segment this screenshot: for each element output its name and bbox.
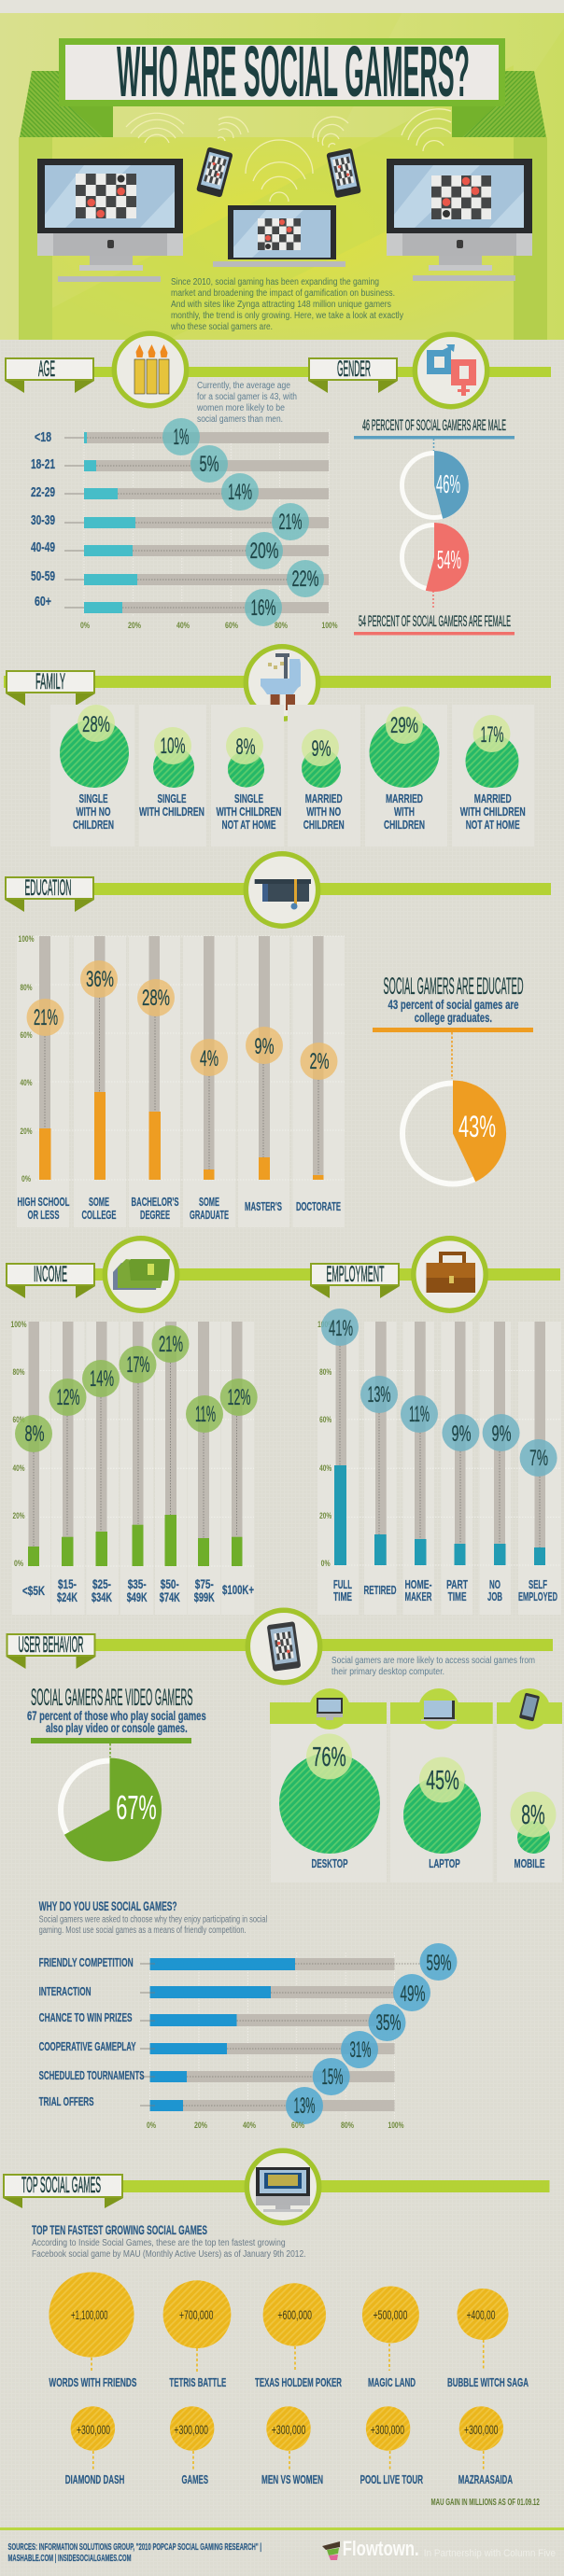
chart: game bubbles: +500,000: [374, 2307, 408, 2322]
text: age intro: women more likely to be: [196, 403, 285, 413]
chart: male donut: 46%: [436, 469, 460, 498]
chart: income bars: $25-: [92, 1576, 111, 1591]
chart: age bars: 80%: [275, 621, 288, 630]
chart: income bars: $35-: [128, 1576, 147, 1591]
chart: education bars: OR LESS: [28, 1208, 60, 1222]
icon: graduation cap: [246, 854, 318, 926]
chart: education bars: 40%: [21, 1078, 32, 1087]
icon: mini laptop: [421, 1701, 457, 1721]
chart: employment bars: MAKER: [405, 1589, 432, 1603]
chart: game bubbles: +300,000: [371, 2422, 404, 2437]
chart: video gamers donut: 67%: [116, 1788, 157, 1827]
chart: education bars: [17, 934, 345, 1227]
panel: header: [0, 0, 564, 340]
chart: education bars: COLLEGE: [82, 1208, 117, 1222]
chart: income bars: 11%: [195, 1402, 216, 1427]
text: device intro: their primary desktop computer.: [331, 1667, 444, 1677]
chart: reasons bars: 31%: [349, 2037, 372, 2063]
chart: education bars: MASTER'S: [245, 1199, 282, 1213]
chart: income bars: [11, 1320, 258, 1615]
section: why use social games: [39, 1898, 457, 2130]
chart: employment bars: 7%: [529, 1446, 548, 1471]
chart: age bars: 60+: [35, 594, 51, 609]
text: age intro: Currently, the average age: [197, 381, 290, 391]
heading: why: WHY DO YOU USE SOCIAL GAMES?: [39, 1898, 177, 1913]
chart: reasons bars: 49%: [400, 1981, 426, 2007]
text: why intro: [39, 1915, 267, 1936]
icon: right desktop computer: [387, 159, 532, 281]
icon: candles: [114, 333, 187, 406]
chart: age bars: 16%: [250, 595, 276, 621]
labels: family: SINGLE: [78, 791, 108, 805]
chart: reasons bars: TRIAL OFFERS: [39, 2094, 94, 2108]
text: why intro: gaming. Most use social games as a means of friendly competition.: [39, 1925, 247, 1936]
chart: employment bars: SELF: [529, 1577, 547, 1591]
chart: game bubbles: MAZRAASAIDA: [458, 2472, 513, 2486]
heading: education: EDUCATION: [24, 875, 71, 901]
labels: family: WITH CHILDREN: [217, 805, 282, 819]
heading: employment: [310, 1262, 400, 1298]
section: family: [4, 647, 551, 847]
chart: education bars: 2%: [310, 1049, 329, 1074]
callout: social gamers are video gamers: also play video or console games.: [46, 1720, 188, 1735]
chart: game bubbles: TETRIS BATTLE: [169, 2375, 227, 2389]
chart: age bars: 0%: [80, 621, 90, 630]
chart: income bars: <$5K: [22, 1583, 45, 1598]
chart: game bubbles: [49, 2272, 529, 2486]
icon: left phone: [196, 147, 233, 198]
chart: education bars: SOME: [199, 1195, 219, 1209]
chart: reasons bars: 0%: [147, 2121, 156, 2130]
icon: laptop: [213, 205, 345, 267]
icon: desktop with game: [247, 2150, 319, 2223]
chart: reasons bars: 13%: [293, 2093, 316, 2119]
chart: employment bars: [317, 1309, 561, 1615]
chart: income bars: $34K: [92, 1589, 112, 1604]
chart: age bars: 21%: [278, 510, 303, 535]
chart: education bars: DOCTORATE: [296, 1199, 341, 1213]
chart: reasons bars: 60%: [291, 2121, 304, 2130]
chart: income bars: $49K: [127, 1589, 148, 1604]
chart: game bubbles: MEN VS WOMEN: [261, 2472, 323, 2486]
chart: age bars: 20%: [250, 539, 278, 564]
chart: employment bars: 100%: [317, 1320, 333, 1329]
heading: family: [6, 669, 95, 706]
labels: family: MARRIED: [474, 791, 512, 805]
chart: age bars: <18: [35, 429, 51, 445]
chart: employment bars: FULL: [333, 1577, 352, 1591]
text: age intro: for a social gamer is 43, with: [197, 392, 297, 402]
chart: age bars: 1%: [174, 425, 189, 450]
chart: device bubbles: [279, 1734, 557, 1870]
icon: gender symbols: [415, 334, 487, 407]
chart: reasons bars: [39, 1943, 457, 2130]
chart: family bubbles: 28%: [82, 712, 110, 737]
icon: briefcase: [414, 1239, 486, 1310]
chart: income bars: 8%: [24, 1421, 45, 1447]
chart: family bubbles: 17%: [480, 722, 504, 748]
chart: game bubbles: +300,000: [174, 2422, 208, 2437]
chart: game bubbles: +600,000: [277, 2307, 312, 2322]
icon: tablet: [247, 1610, 320, 1683]
section: top social games: TOP SOCIAL GAMES: [21, 2173, 101, 2198]
chart: income bars: 100%: [11, 1320, 26, 1329]
icon: mini phone: [519, 1692, 540, 1722]
chart: female donut: 54%: [437, 545, 461, 574]
chart: reasons bars: 15%: [321, 2065, 344, 2090]
labels: family: NOT AT HOME: [466, 818, 520, 832]
callout: social gamers are educated: college graduates.: [415, 1011, 492, 1025]
chart: income bars: 0%: [14, 1559, 23, 1568]
chart: education bars: 20%: [21, 1127, 32, 1136]
text: why intro: Social gamers were asked to choose why they enjoy participating in social: [39, 1915, 267, 1925]
chart: age bars: 30-39: [31, 512, 55, 528]
chart: family bubbles: 8%: [235, 735, 256, 760]
chart: income bars: $15-: [58, 1576, 77, 1591]
chart: reasons bars: SCHEDULED TOURNAMENTS: [39, 2068, 145, 2082]
heading: gender: GENDER: [337, 357, 371, 382]
callout: social gamers are video gamers: 67 percent of those who play social games: [27, 1708, 206, 1723]
chart: education bars: 28%: [142, 986, 170, 1011]
chart: income bars: 80%: [13, 1367, 24, 1377]
text: sources: [7, 2542, 261, 2564]
chart: income bars: $24K: [57, 1589, 78, 1604]
chart: income bars: 17%: [127, 1352, 149, 1378]
chart: employment bars: 13%: [368, 1382, 390, 1407]
chart: employment bars: NO: [489, 1577, 501, 1591]
chart: income bars: $74K: [160, 1589, 180, 1604]
chart: income bars: 12%: [56, 1385, 80, 1410]
chart: reasons bars: 80%: [341, 2121, 354, 2130]
chart: family bubbles: 10%: [161, 734, 185, 759]
chart: device bubbles: LAPTOP: [429, 1856, 460, 1870]
chart: income bars: 60%: [13, 1415, 24, 1424]
heading: top social games: [3, 2173, 123, 2208]
chart: age bars: 60%: [225, 621, 238, 630]
chart: employment bars: PART: [446, 1577, 468, 1591]
icon: left desktop computer: [37, 159, 183, 282]
chart: employment bars: 40%: [319, 1463, 331, 1473]
chart: income bars: $75-: [195, 1576, 214, 1591]
chart: income bars: 14%: [90, 1366, 114, 1392]
chart: education donut: 43%: [458, 1110, 496, 1143]
panels: devices: [270, 1688, 562, 1883]
chart: game bubbles: DIAMOND DASH: [65, 2472, 124, 2486]
intro text: [170, 277, 403, 332]
chart: education bars: 100%: [19, 934, 34, 944]
chart: reasons bars: 100%: [388, 2121, 403, 2130]
heading: user behavior: [6, 1632, 95, 1669]
heading: gender: [308, 357, 398, 393]
section: user behavior: [6, 1610, 562, 1883]
chart: income bars: 40%: [13, 1463, 24, 1473]
chart: reasons bars: 59%: [426, 1951, 452, 1976]
chart: education bars: 80%: [21, 983, 32, 992]
intro text: And with sites like Zynga attracting 148 million unique gamers: [171, 300, 391, 310]
chart: reasons bars: 40%: [243, 2121, 256, 2130]
callout: social gamers are video gamers: [27, 1685, 206, 1757]
chart: reasons bars: 35%: [375, 2010, 402, 2036]
chart: reasons bars: CHANCE TO WIN PRIZES: [39, 2010, 133, 2024]
chart: game bubbles: +700,000: [179, 2307, 214, 2322]
chart: reasons bars: FRIENDLY COMPETITION: [39, 1955, 134, 1969]
section: income: [6, 1239, 560, 1615]
chart: employment bars: 20%: [319, 1511, 331, 1520]
labels: family: CHILDREN: [384, 818, 425, 832]
text: device intro: [331, 1656, 535, 1677]
section: employment: [310, 1239, 561, 1615]
intro text: market and broadening the impact of gamification on business.: [171, 288, 395, 299]
chart: education bars: 36%: [86, 967, 114, 992]
chart: game bubbles: +300,000: [464, 2422, 499, 2437]
chart: device bubbles: DESKTOP: [312, 1856, 348, 1870]
logo text: flowtown: Flowtown.: [343, 2537, 419, 2560]
chart: education bars: HIGH SCHOOL: [17, 1195, 70, 1209]
chart: education bars: 60%: [21, 1030, 32, 1040]
chart: video gamers donut: [61, 1758, 162, 1862]
chart: employment bars: 60%: [319, 1415, 331, 1424]
chart: education bars: 4%: [200, 1046, 219, 1071]
chart: income bars: $99K: [194, 1589, 215, 1604]
callout: male stat: [354, 416, 515, 451]
text: age intro: [196, 381, 297, 425]
icon: mini desktop: [317, 1698, 343, 1720]
callout: social gamers are educated: [373, 973, 533, 1079]
chart: age bars: 50-59: [31, 568, 55, 584]
chart: income bars: $100K+: [222, 1582, 254, 1597]
text: sources: SOURCES: INFORMATION SOLUTIONS GROUP, "2010 POPCAP SOCIAL GAMING RESEARCH" |: [7, 2542, 261, 2553]
labels: family: NOT AT HOME: [222, 818, 276, 832]
chart: employment bars: TIME: [448, 1589, 467, 1603]
text: top ten intro: According to Inside Social Games, these are the top ten fastest growing: [32, 2238, 286, 2248]
chart: game bubbles: +400,00: [467, 2307, 496, 2322]
section: user behavior: SOCIAL GAMERS ARE VIDEO GAMERS: [31, 1685, 192, 1711]
chart: age bars: 40-49: [31, 539, 55, 555]
chart: male donut: [402, 451, 469, 519]
chart: female donut: [402, 523, 469, 592]
logo text: flowtown: [343, 2537, 556, 2560]
chart: age bars: 40%: [176, 621, 190, 630]
heading: age: [5, 357, 94, 393]
chart: income bars: 21%: [159, 1332, 183, 1357]
heading: education: [5, 875, 94, 912]
icon: flowtown logo: [322, 2541, 340, 2560]
chart: employment bars: 80%: [319, 1367, 331, 1377]
intro text: Since 2010, social gaming has been expanding the gaming: [171, 277, 379, 287]
labels: family: WITH CHILDREN: [460, 805, 526, 819]
chart: education bars: BACHELOR'S: [131, 1195, 179, 1209]
chart: reasons bars: 20%: [194, 2121, 207, 2130]
chart: employment bars: 11%: [409, 1402, 430, 1427]
chart: family bubbles: 9%: [312, 736, 331, 762]
chart: education bars: GRADUATE: [190, 1208, 229, 1222]
icon: money: [105, 1239, 177, 1310]
chart: reasons bars: COOPERATIVE GAMEPLAY: [39, 2039, 136, 2053]
chart: employment bars: 9%: [491, 1421, 512, 1447]
labels: family: CHILDREN: [303, 818, 345, 832]
callout: female stat: [354, 591, 515, 635]
section: employment: EMPLOYMENT: [327, 1262, 385, 1287]
icon: wifi signals: [126, 109, 451, 202]
heading: income: [6, 1262, 95, 1298]
section: user behavior: USER BEHAVIOR: [19, 1632, 84, 1658]
chart: age bars: 100%: [321, 621, 338, 630]
section: gender: [308, 334, 515, 635]
chart: employment bars: HOME-: [405, 1577, 431, 1591]
footer: [0, 2527, 564, 2564]
chart: game bubbles: WORDS WITH FRIENDS: [49, 2375, 137, 2389]
text: top ten intro: Facebook social game by MAU (Monthly Active Users) as of January 9th 2012.: [32, 2249, 306, 2260]
chart: education bars: DEGREE: [140, 1208, 170, 1222]
icon: right phone: [326, 148, 361, 198]
chart: employment bars: 9%: [452, 1421, 471, 1447]
intro text: monthly, the trend is only growing. Here, we take a look at exactly: [171, 311, 403, 321]
section: education: [5, 854, 551, 1227]
heading: income: INCOME: [34, 1262, 67, 1287]
heading: family: FAMILY: [35, 669, 65, 694]
labels: family: MARRIED: [305, 791, 343, 805]
chart: family bubbles: 29%: [390, 713, 418, 738]
chart: game bubbles: +300,000: [77, 2422, 110, 2437]
chart: family bubbles: [60, 705, 519, 788]
chart: income bars: 12%: [228, 1385, 250, 1410]
text: age intro: social gamers than men.: [197, 414, 283, 425]
chart: age bars: [31, 418, 338, 630]
chart: education bars: 0%: [21, 1174, 31, 1183]
labels: family: WITH: [394, 805, 415, 819]
intro text: who these social gamers are.: [170, 322, 273, 332]
chart: education bars: SOME: [89, 1195, 109, 1209]
heading: top ten: TOP TEN FASTEST GROWING SOCIAL GAMES: [32, 2222, 207, 2237]
icon: sink: [246, 647, 318, 719]
section: top social games: [3, 2150, 549, 2508]
section: age: [5, 333, 551, 630]
chart: game bubbles: +1,100,000: [71, 2307, 108, 2322]
text: sources: MASHABLE.COM | INSIDESOCIALGAMES.COM: [7, 2554, 131, 2564]
chart: education bars: 21%: [34, 1005, 58, 1030]
chart: age bars: 22-29: [31, 484, 55, 500]
chart: income bars: 20%: [13, 1511, 24, 1520]
chart: income bars: $50-: [161, 1576, 179, 1591]
chart: reasons bars: INTERACTION: [39, 1984, 92, 1998]
labels: family: CHILDREN: [73, 818, 114, 832]
chart: game bubbles: GAMES: [181, 2472, 208, 2486]
chart: device bubbles: 45%: [426, 1766, 459, 1796]
labels: family: WITH NO: [306, 805, 341, 819]
chart: game bubbles: POOL LIVE TOUR: [360, 2472, 423, 2486]
chart: game bubbles: +300,000: [272, 2422, 306, 2437]
chart: education donut: [402, 1081, 506, 1183]
chart: device bubbles: MOBILE: [514, 1856, 545, 1870]
chart: age bars: 20%: [128, 621, 141, 630]
labels: family: [73, 791, 526, 832]
heading: age: AGE: [38, 357, 55, 382]
chart: employment bars: TIME: [333, 1589, 352, 1603]
chart: employment bars: 41%: [329, 1316, 353, 1341]
labels: family: SINGLE: [234, 791, 263, 805]
chart: employment bars: JOB: [487, 1589, 502, 1603]
chart: employment bars: RETIRED: [364, 1583, 396, 1597]
panels: family columns: [50, 705, 534, 847]
chart: device bubbles: 8%: [521, 1800, 545, 1830]
chart: education bars: 9%: [254, 1034, 275, 1059]
chart: age bars: 22%: [291, 567, 319, 592]
labels: family: SINGLE: [157, 791, 187, 805]
chart: game bubbles: TEXAS HOLDEM POKER: [255, 2375, 342, 2389]
chart: age bars: 18-21: [31, 456, 55, 472]
text: top ten intro: [32, 2238, 306, 2260]
chart: age bars: 5%: [200, 452, 219, 477]
chart: device bubbles: 76%: [312, 1743, 346, 1772]
chart: game bubbles: MAGIC LAND: [368, 2375, 416, 2389]
labels: family: MARRIED: [386, 791, 423, 805]
labels: family: WITH NO: [77, 805, 110, 819]
labels: family: WITH CHILDREN: [139, 805, 204, 819]
chart: employment bars: 0%: [321, 1559, 331, 1568]
chart: age bars: 14%: [228, 480, 252, 505]
